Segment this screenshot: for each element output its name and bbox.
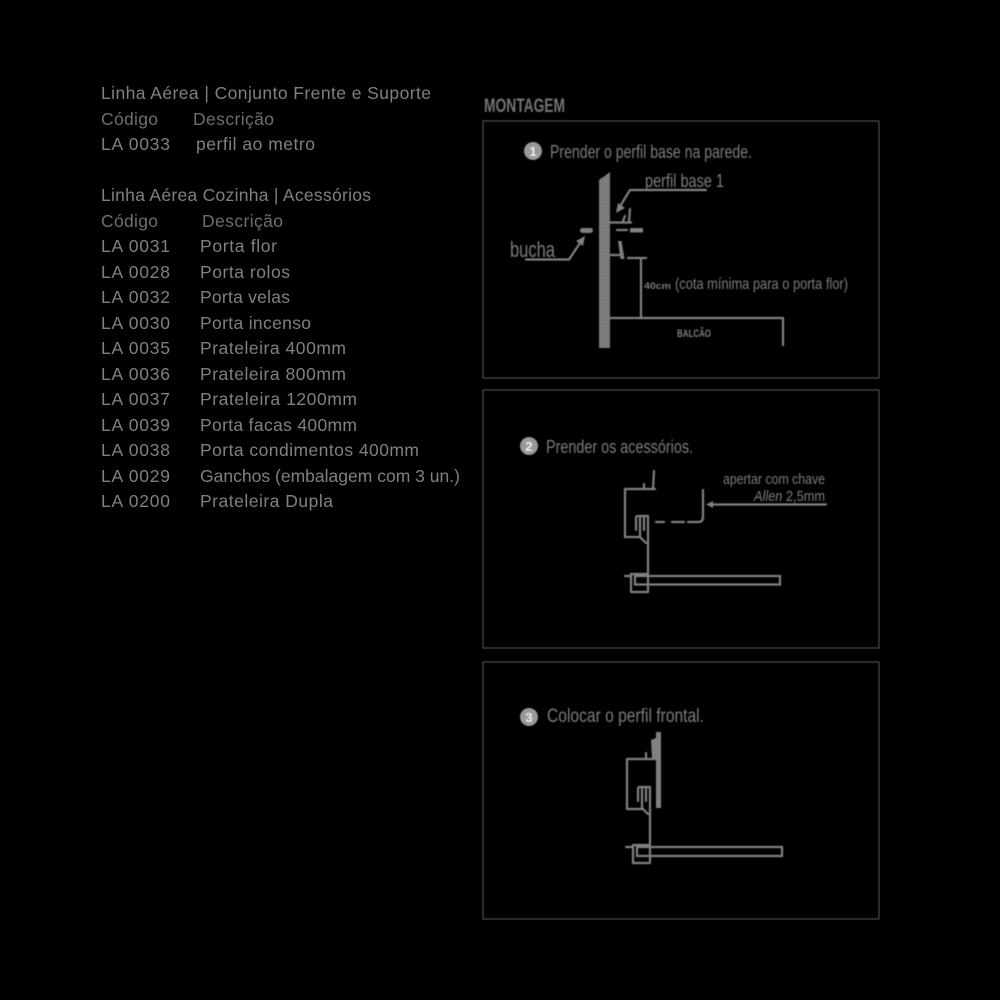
step 2 badge: 2 [525,439,533,454]
table rows: LA 0028 [101,262,170,282]
table rows: Porta flor [200,236,277,256]
step 1 title: Prender o perfil base na parede. [550,142,752,162]
label: chave allen: Allen 2,5mm [753,488,825,505]
table rows: LA 0035 [101,338,170,358]
panel: step 3 [483,662,879,919]
table rows: LA 0031 [101,236,170,256]
panel: step 1 [483,121,879,378]
table rows: Porta rolos [200,262,290,282]
dashed guide [656,490,703,522]
label: perfil base 1: perfil base 1 [645,171,724,191]
heading: linha aérea cozinha: Linha Aérea Cozinha | Acessórios [101,185,371,205]
profile with shelf and front [626,732,782,863]
table rows: Porta velas [200,287,290,307]
table rows: LA 0038 [101,440,170,460]
dimension 40cm: 40cm [644,281,671,292]
table rows: LA 0039 [101,415,170,435]
step 3 title: Colocar o perfil frontal. [547,706,704,727]
text block: conjunto frente e suporte [101,83,431,154]
heading: montagem: MONTAGEM [484,96,565,117]
table header: Descrição [193,109,274,129]
table rows [101,236,460,511]
row LA 0033: LA 0033 [101,134,170,154]
dimension 40cm: (cota mínima para o porta flor) [675,276,848,293]
screw and dowel [580,228,643,233]
table rows: LA 0029 [101,466,170,486]
table header [101,109,274,129]
perfil base drawing [610,209,631,259]
heading: linha aérea conjunto: Linha Aérea | Conjunto Frente e Suporte [101,83,431,103]
label: bucha: bucha [510,237,556,262]
step 3 badge [520,708,538,726]
label: perfil base 1 [616,171,724,213]
panel: step 2 [483,390,879,648]
table rows: Porta incenso [200,313,311,333]
step 2 title: Prender os acessórios. [546,437,693,457]
step 1 badge [524,142,542,160]
wall section [599,172,610,348]
row LA 0033: perfil ao metro [196,134,315,154]
table rows: Porta facas 400mm [200,415,357,435]
dimension 40cm [628,258,848,318]
table rows: LA 0036 [101,364,170,384]
table rows: LA 0037 [101,389,170,409]
counter: balcão: BALCÃO [677,327,711,340]
table rows: Prateleira Dupla [200,491,333,511]
table header acessórios: Código [101,211,158,231]
table rows: LA 0030 [101,313,170,333]
label: chave allen: apertar com chave [723,471,825,488]
table rows: LA 0032 [101,287,170,307]
table rows: LA 0200 [101,491,170,511]
table rows: Prateleira 400mm [200,338,346,358]
step 1 badge: 1 [529,144,537,159]
table rows: Porta condimentos 400mm [200,440,419,460]
profile with shelf [625,471,780,592]
step 2 badge [520,437,538,455]
text block: acessórios [101,185,460,511]
table rows: Ganchos (embalagem com 3 un.) [200,466,460,486]
label: chave allen [706,471,826,508]
step 3 badge: 3 [525,710,533,725]
row LA 0033 [101,134,315,154]
table header: Código [101,109,158,129]
table header acessórios: Descrição [202,211,283,231]
table rows: Prateleira 800mm [200,364,346,384]
counter: balcão [610,318,783,345]
table rows: Prateleira 1200mm [200,389,357,409]
table header acessórios [101,211,283,231]
